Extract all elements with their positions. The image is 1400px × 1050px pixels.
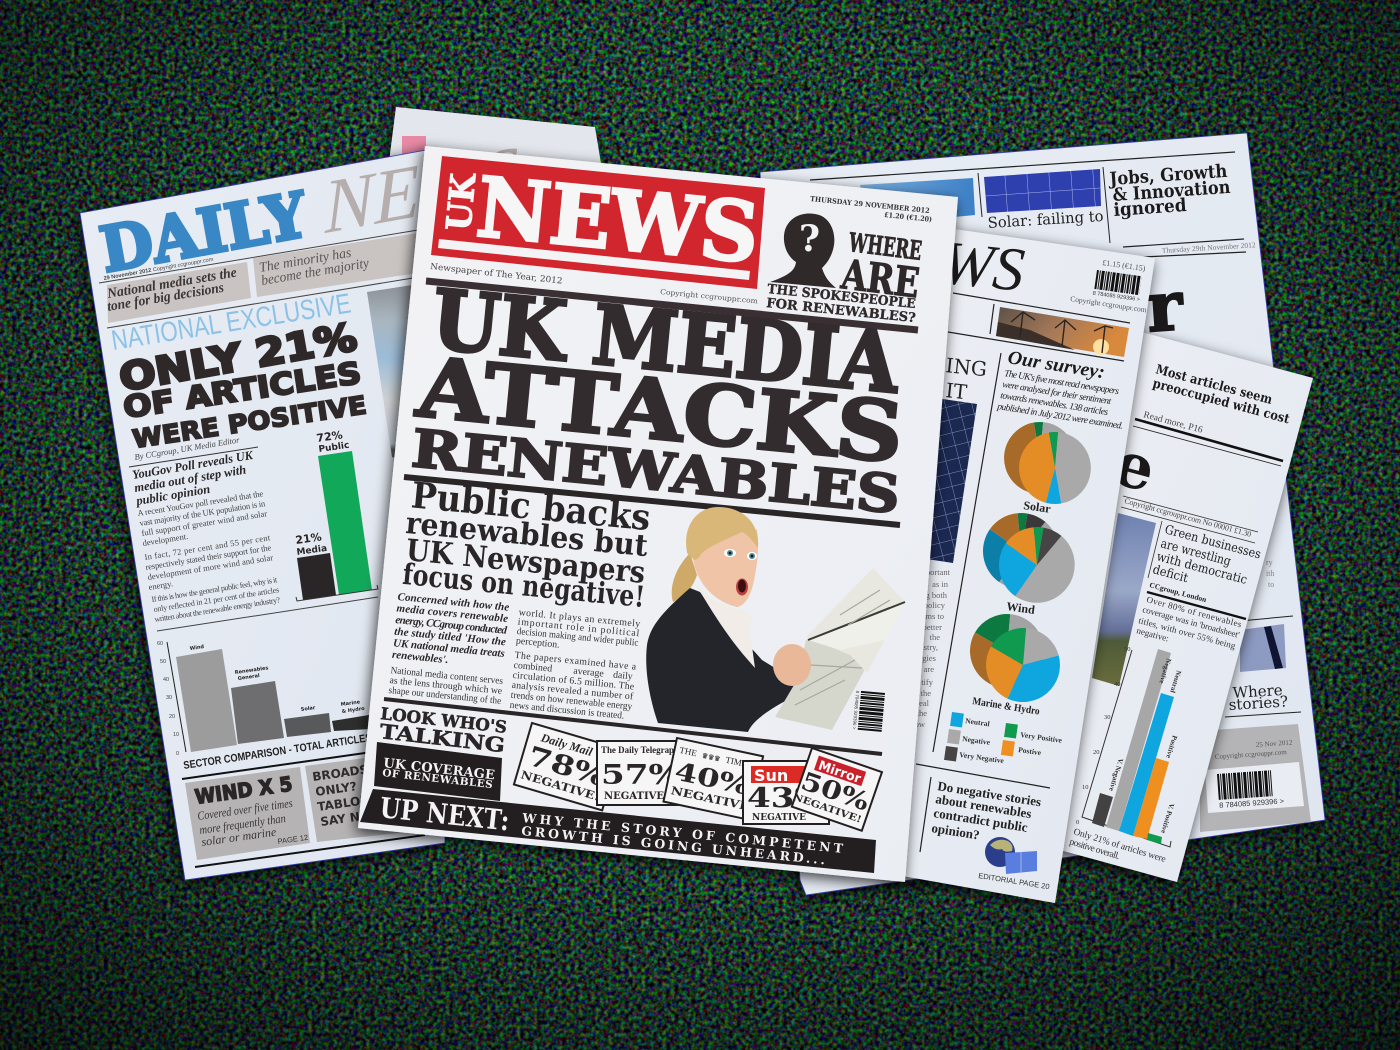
body text columns: news and discussion is treated.	[509, 700, 625, 722]
panel: front newspaper, UK news	[358, 146, 958, 882]
pie chart: marine and hydro: Marine & Hydro	[972, 696, 1040, 718]
legend: Postive	[1018, 745, 1042, 757]
chart: sentiment bars: V. Negative	[1107, 757, 1125, 792]
date line: 29 November 2012	[103, 268, 152, 282]
headline: UK media attacks renewables: RENEWABLES	[409, 418, 903, 526]
chart: sector comparison: Marine	[340, 699, 361, 708]
chart: sentiment bars: Positive	[1164, 734, 1179, 759]
panel: back newspaper, top sliver	[388, 107, 602, 170]
image: sky and field	[1092, 513, 1156, 686]
box: broadsheets: SAY NO	[319, 808, 371, 829]
image: wind turbine photo	[860, 178, 975, 225]
caption: Only 21% of articles were	[1072, 826, 1167, 865]
card: the sun 43%: NEGATIVE	[752, 813, 806, 823]
copyright: Copyright ccgrouppr.com	[1070, 294, 1147, 314]
body text: Over 80% of renewables	[1145, 594, 1243, 629]
heading: green businesses: with democratic	[1155, 548, 1249, 587]
chart: sentiment bars: 50	[1124, 646, 1130, 653]
box: broadsheets	[305, 750, 425, 842]
card: the times 40%: TIMES	[725, 755, 753, 770]
intro text: were analysed for their sentiment	[1002, 379, 1112, 407]
body text: vast majority of the UK population is in	[139, 498, 266, 528]
image: solar panels	[984, 169, 1101, 213]
image: shocked woman reading newspaper	[646, 507, 905, 732]
box: wind x 5: more frequently than	[198, 811, 287, 837]
shirt	[695, 583, 755, 668]
chart: sentiment bars	[1076, 646, 1183, 847]
tagline: Newspaper of The Year, 2012	[430, 262, 563, 287]
chart: sector comparison: General	[237, 673, 260, 682]
heading: jobs growth and innovation ignored: ignored	[1113, 195, 1188, 221]
chart: sentiment bars: 20	[1093, 749, 1100, 756]
body text columns: as the lens through which we	[389, 675, 503, 697]
card: daily mirror 50%: Mirror	[816, 759, 863, 787]
heading: jobs growth and innovation ignored	[1107, 161, 1231, 221]
box: minority	[253, 232, 425, 297]
hand	[773, 644, 811, 686]
panel: left newspaper, daily news	[80, 130, 521, 880]
date and price: THURSDAY 29 NOVEMBER 2012	[810, 194, 930, 215]
card: the times 40%: 40%	[672, 757, 753, 801]
callout: UK coverage of renewables	[374, 742, 502, 801]
body text columns	[388, 595, 641, 722]
card: daily mirror 50%: 50%	[797, 766, 873, 817]
date and price: £1.20 (€1.20)	[884, 210, 932, 224]
chart: sentiment bars: 10	[1082, 784, 1088, 791]
pie chart: solar	[1004, 422, 1091, 516]
subheadline: public backs renewables	[399, 474, 654, 614]
body text columns: average	[573, 666, 605, 680]
heading: jobs growth and innovation ignored: Jobs, Growth	[1107, 161, 1228, 190]
body text: written about the renewable energy industry?	[154, 595, 281, 624]
subheading: yougov poll: YouGov Poll reveals UK	[131, 448, 255, 482]
body text: full support of greater wind and solar	[141, 508, 268, 538]
card: the sun 43%: Sun	[754, 766, 788, 785]
copyright: Copyright ccgrouppr.com	[660, 288, 759, 305]
headline: only 21% of articles were positive: WERE POSITIVE	[131, 390, 368, 454]
intro text: published in July 2012 were examined.	[996, 402, 1124, 432]
newspaper	[775, 568, 905, 730]
body text	[137, 488, 281, 624]
standfirst text: renewables'.	[392, 649, 449, 666]
date line: Thursday 29th November 2012	[1162, 240, 1256, 255]
chart: sector comparison: 20	[169, 714, 175, 720]
panel: right newspaper, most articles: Read more, P16	[1142, 410, 1204, 436]
headline: only 21% of articles were positive: ONLY 21%	[116, 315, 360, 400]
body text	[1135, 594, 1243, 651]
body text columns: National media content serves	[390, 665, 504, 687]
footer box with barcode: Copyright ccgrouppr.com	[1215, 748, 1287, 761]
panel: back right newspaper	[760, 133, 1325, 895]
chart: sector comparison: 60	[157, 641, 163, 647]
chart: sentiment bars: Negative	[1157, 657, 1173, 685]
card: daily mail 78%	[514, 723, 620, 810]
box: wind x 5: WIND X 5	[193, 772, 294, 809]
headline: only 21% of articles were positive	[116, 315, 368, 454]
body text: In fact, 72 per cent and 55 per cent	[144, 532, 271, 562]
footer box with barcode	[1200, 724, 1311, 832]
chart: sector comparison: Solar	[300, 705, 316, 713]
body text fragments: ms to	[925, 611, 944, 621]
card: daily telegraph 57%: NEGATIVE	[604, 791, 664, 802]
chart: sentiment bars: V. Positive	[1159, 802, 1176, 834]
card: the times 40%	[663, 738, 763, 820]
body text fragments: g both	[926, 590, 948, 600]
chart: sentiment bars: 0	[1076, 819, 1079, 826]
chart: public vs media	[295, 428, 378, 601]
masthead: daily news: NEWS	[321, 130, 521, 250]
barcode	[1092, 270, 1143, 303]
body text: titles, with over 55% being	[1137, 615, 1237, 651]
intro text	[996, 368, 1124, 432]
body text fragments: the	[917, 708, 927, 718]
caption: positive overall.	[1068, 837, 1121, 862]
jacket	[646, 588, 800, 732]
heading: look who's talking: LOOK WHO'S	[380, 704, 508, 737]
body text columns: important role in political	[517, 617, 640, 639]
barcode: 8 784085 929396 >	[852, 690, 860, 730]
small text fragments	[1266, 558, 1274, 589]
body text fragments: as in	[932, 579, 949, 589]
pie chart: marine and hydro	[970, 614, 1060, 718]
card: the times 40%: NEGATIVE	[670, 784, 751, 813]
body text fragments: the	[921, 688, 931, 698]
chart: sector comparison: Renewables	[234, 665, 269, 676]
chart: sentiment bars: 40	[1114, 681, 1120, 688]
callout: where are the spokespeople: ARE	[838, 250, 922, 307]
body text columns: analysis revealed a number of	[511, 680, 634, 703]
masthead: daily news: DAILY	[95, 178, 313, 287]
heading: do negative stories: Do negative stories	[937, 778, 1042, 809]
heading: do negative stories	[931, 778, 1042, 843]
subheading: yougov poll	[131, 448, 255, 508]
body text: respectively stated their support for the	[145, 542, 272, 572]
box: national media: National media sets the	[105, 266, 238, 302]
panel: right newspaper, most articles: CCgroup, London	[1148, 580, 1208, 604]
body text: negative:	[1135, 625, 1170, 643]
price: £1.15 (€1.15)	[1102, 258, 1146, 273]
standfirst text: media covers renewable	[396, 602, 509, 625]
small text fragments: ith	[1266, 569, 1274, 578]
pie chart: solar: Solar	[1023, 498, 1052, 516]
chart: sentiment bars: 30	[1104, 714, 1110, 721]
body text fragments: better	[923, 622, 942, 632]
chart: public vs media: Public	[318, 441, 350, 455]
heading fragment	[944, 353, 988, 404]
body text fragments: are	[924, 664, 934, 674]
card: the sun 43%: 43%	[747, 783, 827, 814]
body text columns: world. It plays an extremely	[518, 607, 641, 630]
subheading: yougov poll: public opinion	[134, 482, 211, 508]
legend: Neutral	[965, 716, 990, 728]
masthead fragment: er	[1101, 266, 1186, 351]
body text fragments	[910, 567, 951, 729]
body text columns: decision making and wider public	[516, 626, 639, 649]
heading: green businesses	[1151, 521, 1263, 587]
pie chart: wind	[983, 513, 1075, 617]
banner: up next: GROWTH IS GOING UNHEARD...	[521, 823, 826, 867]
banner: up next	[360, 789, 876, 873]
box: national media	[105, 262, 251, 323]
chart: public vs media: Media	[296, 544, 328, 558]
icon: globe with solar panel	[985, 837, 1037, 874]
body text columns: shape our understanding of the	[388, 685, 502, 707]
body text: only reflected in 21 per cent of the articles	[153, 585, 280, 614]
standfirst text: the study titled 'How the	[394, 626, 506, 648]
card: daily mirror 50%	[790, 747, 882, 831]
body text fragments: the	[930, 632, 940, 642]
legend: Very Negative	[959, 750, 1005, 765]
heading: look who's talking: TALKING	[378, 719, 506, 757]
heading fragment: ING	[944, 353, 988, 381]
ponytail	[672, 553, 697, 602]
standfirst text: Concerned with how the	[397, 591, 510, 614]
heading: where stories	[1228, 681, 1288, 714]
text: solar failing to: Solar: failing to	[987, 207, 1104, 232]
card: daily telegraph 57%: The Daily Telegraph	[601, 746, 680, 756]
chart: sentiment bars: Neutral	[1168, 669, 1183, 694]
subheadline: public backs renewables: Public backs	[409, 474, 652, 539]
heading: green businesses: are wrestling	[1159, 535, 1233, 569]
callout: where are the spokespeople: FOR RENEWABLES?	[766, 296, 917, 326]
subheading: yougov poll: media out of step with	[133, 462, 247, 495]
callout: where are the spokespeople	[766, 228, 923, 326]
chart title: SECTOR COMPARISON - TOTAL ARTICLES	[183, 732, 372, 772]
standfirst text: UK national media treats	[393, 637, 505, 660]
intro text: towards renewables. 138 articles	[1000, 391, 1109, 418]
heading: most articles preoccupied with cost: Most articles seem	[1154, 362, 1274, 408]
heading: green businesses: Green businesses	[1163, 521, 1263, 562]
body text: energy.	[148, 578, 174, 592]
box: national media: tone for big decisions	[106, 281, 226, 315]
subheadline: public backs renewables: UK Newspapers	[404, 533, 647, 591]
chart: public vs media: 21%	[295, 530, 323, 547]
card: the times 40%: THE	[679, 745, 698, 758]
neck and face	[693, 527, 758, 607]
box: broadsheets: ONLY?	[314, 779, 358, 799]
masthead: daily news	[95, 130, 521, 287]
heading: do negative stories: contradict public	[933, 805, 1029, 835]
pie chart: wind: Wind	[1006, 599, 1036, 617]
image: solar panel	[900, 395, 977, 563]
body text fragments: portant	[926, 567, 951, 577]
chart: sector comparison: 50	[160, 659, 166, 665]
callout: UK coverage of renewables: UK COVERAGE	[383, 756, 496, 783]
icon: head silhouette with question mark: ?	[799, 218, 820, 260]
footer box with barcode: 8 784085 929396 >	[1219, 796, 1285, 810]
banner: up next: WHY THE STORY OF COMPETENT	[521, 810, 844, 856]
small text fragments: to	[1268, 580, 1274, 589]
card: the sun 43%	[743, 761, 829, 824]
body text columns: circulation of 6.5 million. The	[512, 670, 635, 693]
standfirst text: energy, CCgroup conducted	[395, 614, 508, 637]
logo: UK news masthead: NEWS	[473, 160, 763, 282]
card: daily mail 78%: NEGATIVE!	[519, 768, 602, 804]
chart: sector comparison: 10	[173, 732, 179, 738]
body text: development of more wind and solar	[147, 552, 274, 582]
chart: sector comparison: 0	[176, 751, 179, 757]
heading: our survey: Our survey:	[1006, 347, 1106, 383]
banner: up next: UP NEXT:	[378, 791, 511, 838]
barcode: 8 784085 929396 >	[1092, 291, 1140, 303]
eyes and mouth	[724, 549, 757, 596]
card: daily mail 78%: Daily Mail	[538, 730, 595, 759]
panel: middle newspaper, our survey	[859, 220, 1155, 903]
masthead fragment: e	[1106, 426, 1163, 507]
box: wind x 5	[185, 767, 310, 860]
box: minority: The minority has	[258, 246, 353, 276]
subheadline: public backs renewables: focus on negative!	[401, 557, 646, 614]
body text columns: perception.	[515, 636, 560, 651]
body text fragments: ogies	[918, 653, 936, 663]
heading: where stories: stories?	[1228, 692, 1288, 714]
card: the times 40%: ♛♛♛	[701, 752, 721, 763]
legend	[944, 712, 1063, 765]
callout: where are the spokespeople: WHERE	[847, 228, 923, 267]
barcode	[852, 690, 885, 732]
legend: Very Positive	[1020, 730, 1063, 745]
body text columns: combined	[513, 660, 553, 675]
callout: where are the spokespeople: THE SPOKESPEOPLE	[767, 282, 916, 312]
heading: where stories: Where	[1232, 681, 1283, 702]
body text fragments: policy	[924, 600, 946, 610]
box: wind x 5: Covered over five times	[196, 796, 294, 823]
card: daily telegraph 57%: 57%	[601, 760, 681, 791]
body text: coverage was in 'broadsheet'	[1141, 604, 1241, 640]
heading: look who's talking	[378, 704, 508, 757]
image: sunset turbines	[996, 307, 1129, 357]
body text columns: trends on how renewable energy	[510, 690, 633, 712]
editorial page label: EDITORIAL PAGE 20	[978, 871, 1050, 891]
box: broadsheets: TABLOIDS	[316, 791, 384, 814]
chart: public vs media: 72%	[316, 428, 344, 445]
hair	[686, 507, 758, 560]
headline: UK media attacks renewables: UK MEDIA	[428, 272, 904, 412]
card: daily mirror 50%: NEGATIVE!	[791, 792, 863, 826]
subheadline: public backs renewables: renewables but	[404, 506, 649, 564]
body text fragments: how	[910, 719, 926, 729]
heading: most articles preoccupied with cost: preoccupied with cost	[1151, 376, 1291, 427]
box: wind x 5: solar or marine	[200, 825, 278, 849]
headline: UK media attacks renewables: ATTACKS	[412, 340, 907, 482]
chart: sector comparison: 40	[163, 677, 169, 683]
masthead fragment: NEWS	[859, 220, 1028, 305]
headline: only 21% of articles were positive: OF ARTICLES	[121, 356, 364, 426]
card: daily mail 78%: 78%	[524, 741, 610, 793]
box: wind x 5: PAGE 12	[277, 833, 309, 846]
image: sky with dark stripe	[1240, 624, 1286, 672]
panel: right newspaper, most articles	[1060, 329, 1313, 882]
kicker: national exclusive: NATIONAL EXCLUSIVE	[109, 287, 353, 356]
body text: If this is how the general public feel, why is it	[151, 575, 279, 604]
logo: UK news masthead: UK	[439, 171, 485, 233]
callout: UK coverage of renewables: OF RENEWABLES	[382, 767, 493, 791]
chart: sector comparison: & Hydro	[341, 706, 366, 715]
heading: do negative stories: about renewables	[935, 791, 1033, 821]
body text fragments: ustry,	[919, 642, 938, 652]
intro text: The UK's five most read newspapers	[1004, 368, 1120, 397]
body text fragments: tify	[921, 677, 934, 687]
box: minority: become the majority	[260, 256, 371, 289]
date line	[103, 257, 214, 282]
body text: development.	[142, 531, 189, 548]
icon: head silhouette with question mark	[770, 213, 836, 288]
standfirst text	[392, 591, 510, 672]
chart: sector comparison: Wind	[189, 644, 205, 652]
body text: A recent YouGov poll revealed that the	[137, 488, 264, 518]
legend: Negative	[962, 734, 991, 747]
date line: Copyright ccgrouppr.com	[153, 257, 214, 273]
heading: do negative stories: opinion?	[931, 820, 981, 843]
body text columns: The papers examined have a	[514, 650, 637, 673]
card: daily telegraph 57%	[597, 741, 683, 805]
image: sky	[367, 283, 425, 470]
headline: UK media attacks renewables	[408, 271, 917, 526]
footer box with barcode: 25 Nov 2012	[1256, 738, 1293, 749]
heading: jobs growth and innovation ignored: & Innovation	[1112, 177, 1231, 206]
byline: By CCgroup, UK Media Editor	[134, 434, 241, 462]
box: broadsheets: BROADSHEETS	[311, 756, 412, 784]
body text fragments: eal	[919, 698, 930, 708]
chart: sector comparison: 30	[166, 695, 172, 701]
copyright line: Copyright ccgrouppr.com No 00001 £1.30	[1123, 496, 1252, 539]
heading: green businesses: deficit	[1151, 561, 1190, 585]
small text fragments: ry	[1266, 558, 1273, 567]
body text columns: daily	[613, 669, 633, 682]
chart: sector comparison	[157, 641, 371, 757]
heading fragment: IT	[944, 378, 969, 404]
